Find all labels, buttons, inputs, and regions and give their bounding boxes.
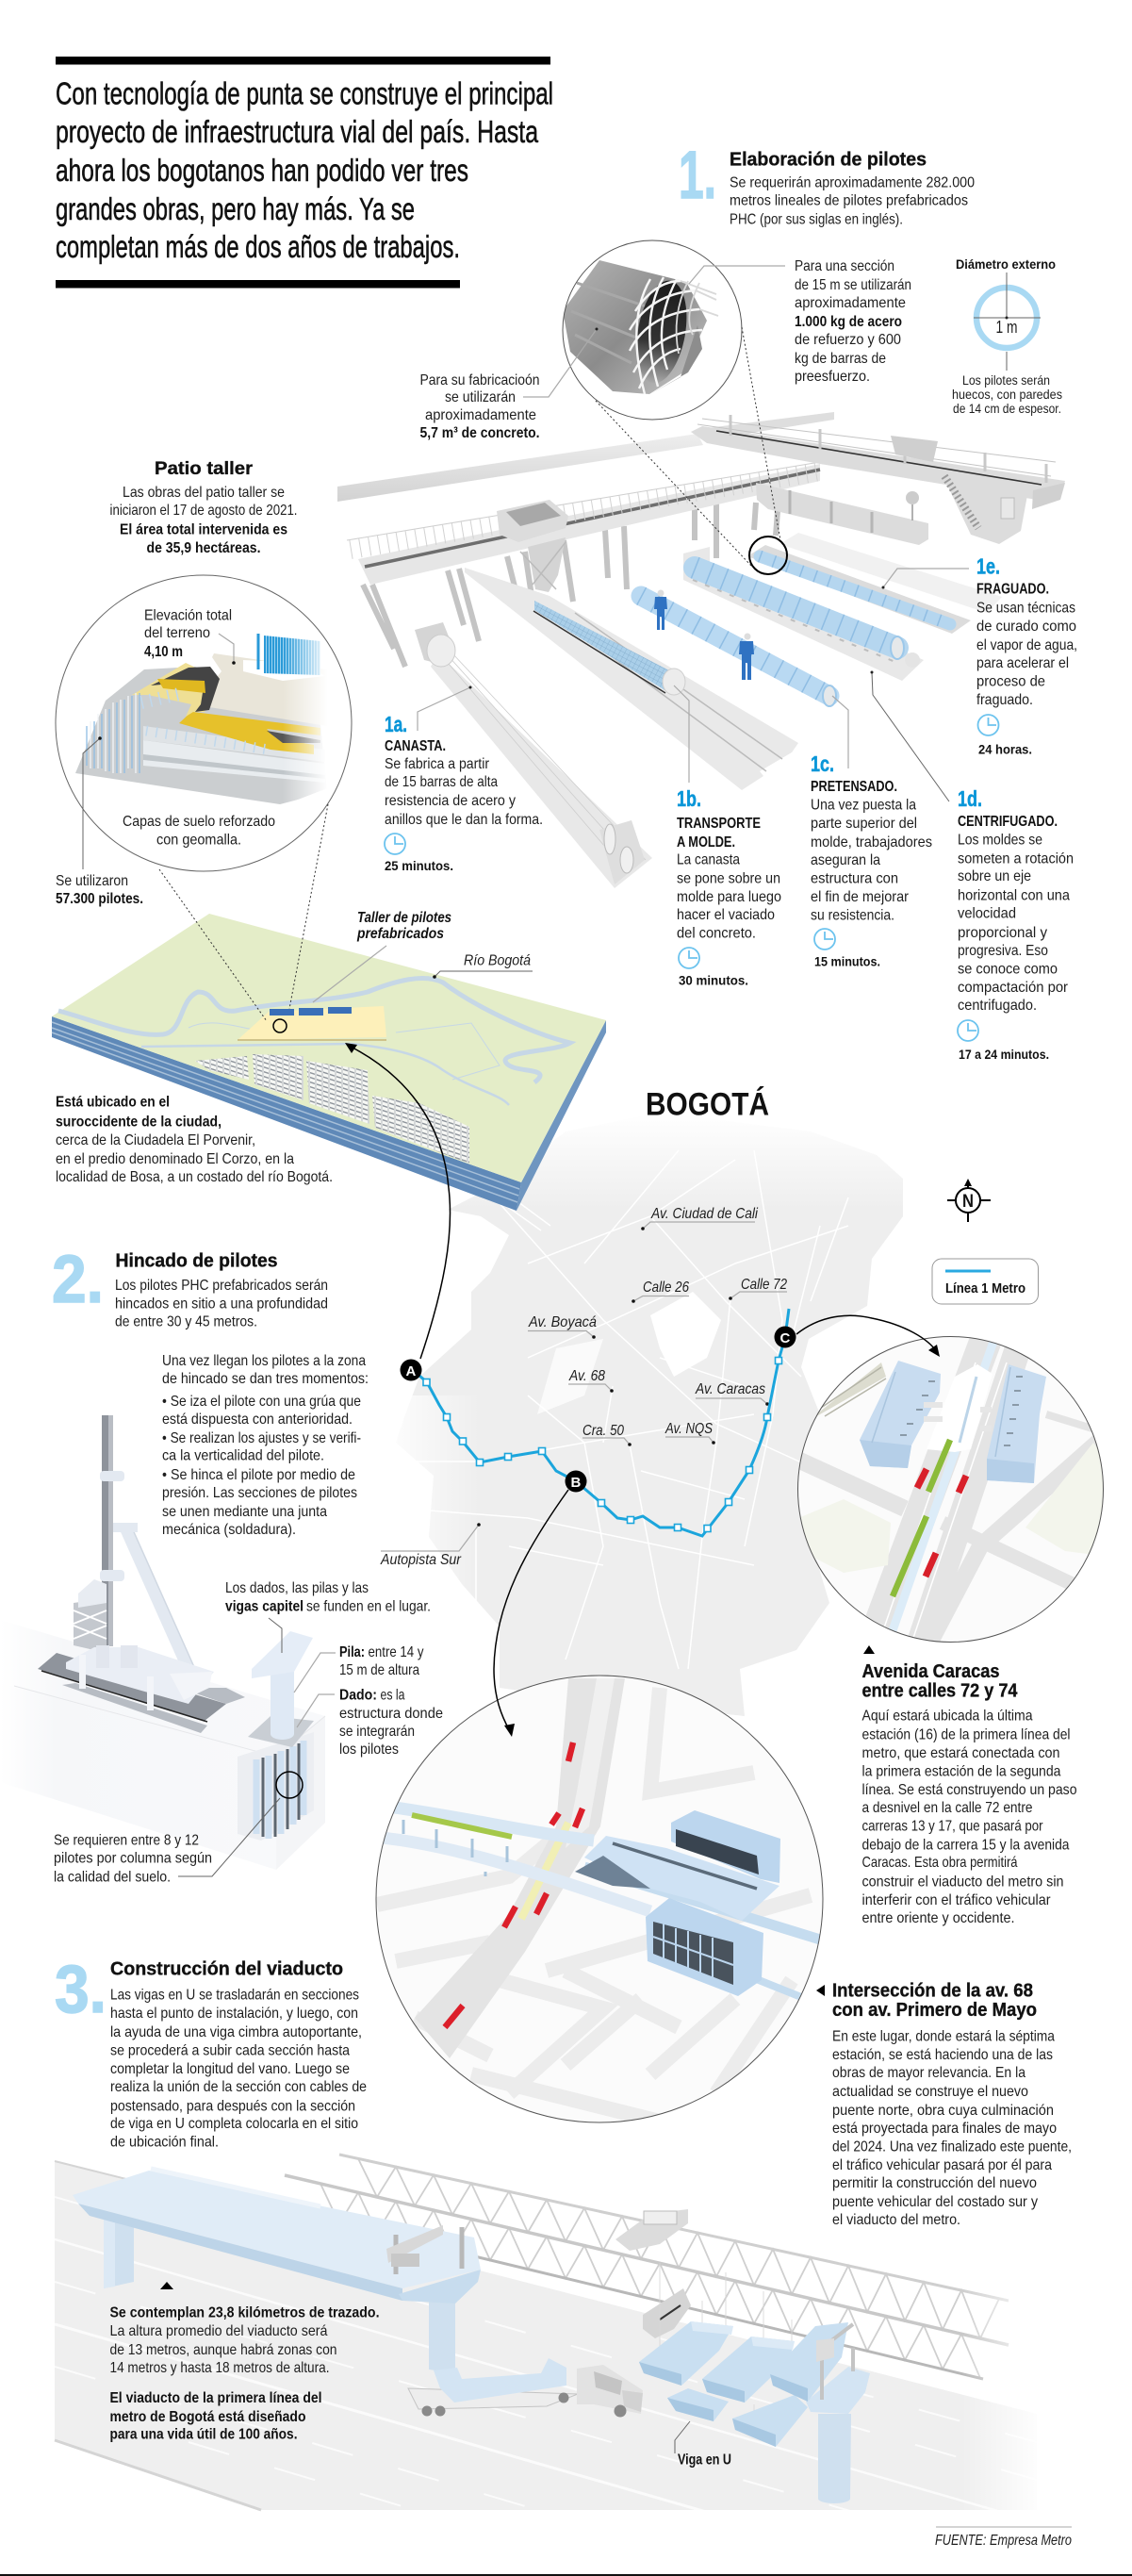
dotted zoom guides to site [159, 804, 328, 1021]
text: Intersección de la av. 68: puente norte, obra cuya culminación [832, 2103, 1054, 2119]
step 1b text: se pone sobre un [677, 871, 780, 886]
step 1c text: 15 minutos. [814, 954, 880, 969]
pier and deck [73, 2169, 481, 2373]
street labels: Cra. 50 [582, 1423, 624, 1439]
text: Intersección de la av. 68: estación, se está haciendo una de las [832, 2047, 1053, 2063]
illustration: viaduct construction scene [55, 2154, 1009, 2512]
driving steps text [162, 1353, 369, 1538]
street labels: Calle 72 [741, 1277, 787, 1293]
title block: grandes obras, pero hay más. Ya se [56, 191, 415, 226]
step 1e text: 24 horas. [978, 741, 1032, 756]
suspended U beams [639, 2263, 808, 2447]
patio magnifier: reinforced soil layers: del terreno [144, 625, 210, 641]
text: Avenida Caracas: a desnivel en la calle 72 entre [861, 1800, 1033, 1816]
text: Intersección de la av. 68: está proyectada para finales de mayo [832, 2121, 1057, 2137]
road surface [55, 2160, 1003, 2512]
section 1 heading: Elaboración de pilotes: metros lineales de pilotes prefabricados [730, 192, 968, 209]
diagram: external diameter ring: Los pilotes serán [962, 372, 1050, 388]
location text: en el predio denominado El Corzo, en la [56, 1151, 294, 1167]
section 3 heading: Construcción del viaducto: Las vigas en U se trasladarán en secciones [110, 1988, 359, 2003]
step 1c text: molde, trabajadores [811, 834, 932, 850]
section 2 heading: Hincado de pilotes: Hincado de pilotes [115, 1250, 277, 1271]
street labels: Autopista Sur [380, 1552, 462, 1568]
callout: steel quantities: de refuerzo y 600 [795, 332, 901, 348]
callout: dados, pilas, vigas capitel [225, 1580, 431, 1653]
callout: dado: los pilotes [339, 1742, 399, 1758]
driving steps text: • Se iza el pilote con una grúa que [162, 1394, 361, 1410]
step 1c text: 1c. [811, 751, 834, 776]
label: Taller de pilotes prefabricados: prefabricados [356, 926, 444, 942]
text: Intersección de la av. 68: actualidad se construye el nuevo [832, 2084, 1028, 2100]
title block: ahora los bogotanos han podido ver tres [56, 153, 468, 188]
title block: proyecto de infraestructura vial del país. Hasta [56, 114, 538, 149]
text: Avenida Caracas: la primera estación de la segunda [861, 1763, 1061, 1780]
callout: pila [294, 1644, 424, 1693]
magnifier B: Av. 68 intersection station [372, 1676, 829, 2140]
step 1d text: Los moldes se [958, 832, 1042, 849]
step 1e curing trench [747, 533, 1002, 634]
callout: steel quantities: Para una sección [795, 258, 894, 274]
marker C [775, 1326, 796, 1348]
callout: dado: Dado: [339, 1688, 377, 1703]
section 2 heading: Hincado de pilotes: hincados en sitio a una profundidad [115, 1296, 328, 1313]
legend [932, 1259, 1039, 1304]
step 1e text: el vapor de agua, [976, 637, 1077, 653]
text: Avenida Caracas: metro, que estará conectada con [861, 1745, 1059, 1761]
step 1d text: centrifugado. [958, 998, 1037, 1014]
section 1 heading: Elaboración de pilotes: 1. [679, 139, 716, 213]
label: Río Bogotá [433, 952, 533, 979]
callout: length and height: 14 metros y hasta 18 metros de altura. [109, 2360, 330, 2376]
gantry crane [691, 412, 1065, 545]
street labels: Av. Boyacá [528, 1314, 597, 1330]
step 1a text: 1a. [385, 712, 407, 736]
street labels: Calle 26 [643, 1280, 689, 1296]
label: Río Bogotá: Río Bogotá [464, 952, 531, 969]
step 1d text: horizontal con una [958, 888, 1070, 903]
callout: 57.300 piles [56, 736, 143, 907]
dotted zoom guides [596, 327, 780, 566]
callout: dado [297, 1688, 443, 1758]
callout: steel quantities: de 15 m se utilizarán [795, 277, 911, 293]
compass [947, 1179, 991, 1222]
section 3 heading: Construcción del viaducto: la ayuda de una viga cimbra autoportante, [110, 2024, 362, 2040]
map base: Bogotá city silhouette [377, 1113, 903, 1716]
step 1e text: de curado como [976, 619, 1076, 635]
callout: pila: Pila: [339, 1644, 365, 1660]
section 3 heading: Construcción del viaducto: postensado, para después con la sección [110, 2099, 355, 2114]
step 1d mold bed [683, 547, 924, 681]
step 1d text: velocidad [958, 905, 1016, 922]
street labels: Av. 68 [568, 1368, 605, 1384]
illustration: pile driving rig and column [0, 1415, 325, 1870]
Patio taller text [109, 459, 298, 556]
detail marker ring [749, 537, 787, 574]
diagram: external diameter ring: 1 m [995, 318, 1018, 337]
callout: pila: 15 m de altura [339, 1662, 419, 1678]
diagram: external diameter ring: Diámetro externo [956, 256, 1056, 272]
step 1b platform and mold [465, 568, 798, 790]
step 1b text: hacer el vaciado [677, 907, 775, 923]
text: Intersección de la av. 68: permitir la construcción del nuevo [832, 2175, 1037, 2191]
section 1 heading: Elaboración de pilotes: PHC (por sus siglas en inglés). [730, 211, 903, 228]
arrow: A to workshop [345, 1043, 451, 1359]
step 1a text: de 15 barras de alta [385, 774, 498, 790]
section 2 heading: Hincado de pilotes: 2. [52, 1243, 104, 1317]
callout: concrete quantity: se utilizarán [445, 389, 516, 405]
illustration: precast pile factory [337, 412, 1065, 888]
Patio taller text: iniciaron el 17 de agosto de 2021. [109, 503, 298, 519]
text: Intersección de la av. 68 [816, 1980, 1072, 2228]
label: Taller de pilotes prefabricados: Taller de pilotes [357, 910, 451, 926]
diagram: external diameter ring: de 14 cm de espesor. [953, 401, 1061, 416]
driving steps text: • Se realizan los ajustes y se verifi- [162, 1430, 361, 1446]
callout: steel quantities [689, 258, 911, 385]
text: Intersección de la av. 68: En este lugar, donde estará la séptima [832, 2029, 1055, 2044]
callout: concrete quantity [420, 328, 598, 441]
section 2 heading: Hincado de pilotes: Los pilotes PHC prefabricados serán [115, 1278, 328, 1294]
arrow: C to station [796, 1315, 940, 1357]
icon: prefabricated pile section magnifier [563, 240, 742, 420]
step 1a text: CANASTA. [385, 738, 446, 754]
step 1c text [811, 696, 932, 969]
heading: Bogotá: BOGOTÁ [646, 1086, 769, 1122]
step 1b text: A MOLDE. [677, 834, 735, 850]
text: Avenida Caracas [861, 1645, 1077, 1926]
street labels [380, 1206, 787, 1568]
patio magnifier: reinforced soil layers: Elevación total [144, 607, 232, 624]
text: Intersección de la av. 68: el tráfico vehicular pasará por él para [832, 2157, 1052, 2173]
step 1d text: CENTRIFUGADO. [958, 814, 1058, 830]
step 1a text: 25 minutos. [385, 858, 453, 873]
driving steps text: está dispuesta con anterioridad. [162, 1412, 353, 1428]
columns [363, 502, 778, 667]
step 1d text: 17 a 24 minutos. [959, 1047, 1049, 1062]
callout: concrete quantity: aproximadamente [425, 407, 536, 423]
driving steps text: Una vez llegan los pilotes a la zona [162, 1353, 366, 1369]
step 1e text: 1e. [976, 554, 1000, 579]
driving steps text: ca la verticalidad del pilote. [162, 1448, 324, 1463]
callout: piles per column: la calidad del suelo. [54, 1869, 171, 1886]
section 2 heading: Hincado de pilotes [52, 1243, 328, 1329]
step 1e text: fraguado. [976, 692, 1033, 708]
driving steps text: mecánica (soldadura). [162, 1522, 296, 1538]
step 1b text: TRANSPORTE [677, 816, 761, 832]
legend: Línea 1 Metro [945, 1280, 1025, 1296]
diagram: external diameter ring: huecos, con paredes [952, 387, 1062, 402]
location text: localidad de Bosa, a un costado del río Bogotá. [56, 1169, 333, 1185]
callout: 57.300 piles: 57.300 pilotes. [56, 891, 143, 907]
street labels: Av. Caracas [695, 1381, 765, 1397]
callout: length and height: Se contemplan 23,8 kilómetros de trazado. [109, 2304, 379, 2321]
step 1c text: PRETENSADO. [811, 779, 897, 795]
truss [285, 2155, 1009, 2379]
driving steps text: • Se hinca el pilote por medio de [162, 1467, 355, 1483]
callout: dados, pilas, vigas capitel: vigas capitel [225, 1599, 304, 1614]
text: Avenida Caracas: carreras 13 y 17, que pasará por [861, 1818, 1043, 1835]
text: Avenida Caracas: Caracas. Esta obra permitirá [861, 1855, 1018, 1871]
section 3 heading: Construcción del viaducto [55, 1953, 367, 2150]
callout: steel quantities: aproximadamente [795, 295, 906, 311]
section 3 heading: Construcción del viaducto: completar la longitud del vano. Luego se [110, 2061, 350, 2077]
step 1b text: La canasta [677, 852, 740, 867]
step 1d text: proporcional y [958, 925, 1047, 941]
callout: length and height: La altura promedio del viaducto será [109, 2323, 328, 2339]
location text [56, 1094, 333, 1185]
patio magnifier: reinforced soil layers: 4,10 m [144, 644, 183, 660]
patio magnifier: reinforced soil layers: con geomalla. [156, 832, 241, 849]
arrow: B to intersection [494, 1490, 568, 1737]
step 1c text: su resistencia. [811, 907, 894, 924]
step 1a text [385, 686, 543, 873]
text: Avenida Caracas: línea. Se está construyendo un paso [861, 1782, 1077, 1798]
text: Avenida Caracas: estación (16) de la primera línea del [861, 1727, 1071, 1742]
gantries [615, 2209, 691, 2338]
Patio taller text: de 35,9 hectáreas. [147, 540, 260, 556]
section 3 heading: Construcción del viaducto: de viga en U completa colocarla en el sitio [110, 2116, 358, 2132]
column [248, 1631, 314, 1747]
bottom rule [0, 2574, 1132, 2576]
driving steps text: de hincado se dan tres momentos: [162, 1371, 369, 1387]
urban blocks [195, 1054, 469, 1164]
text: Avenida Caracas: Aquí estará ubicada la última [861, 1709, 1033, 1724]
far pier [770, 2322, 870, 2503]
title block [56, 57, 553, 289]
marker B [566, 1471, 586, 1492]
label: Taller de pilotes prefabricados [313, 910, 451, 1002]
piles under column [238, 1732, 314, 1841]
patio magnifier: reinforced soil layers [56, 575, 356, 871]
step 1c text: el fin de mejorar [811, 889, 910, 905]
workshop yard [238, 1006, 386, 1040]
step 1b text: del concreto. [677, 926, 756, 941]
callout: length and height: de 13 metros, aunque habrá zonas con [109, 2342, 337, 2358]
text: Avenida Caracas: interferir con el tráfico vehicular [861, 1892, 1051, 1908]
street labels: Av. Ciudad de Cali [650, 1206, 758, 1222]
driving steps text: se unen mediante una junta [162, 1504, 327, 1520]
step 1d text: compactación por [958, 980, 1069, 996]
section 3 heading: Construcción del viaducto: se procederá a subir cada sección hasta [110, 2042, 350, 2059]
location text: cerca de la Ciudadela El Porvenir, [56, 1132, 255, 1148]
street labels: Av. NQS [664, 1421, 713, 1437]
walkway [347, 462, 820, 585]
driving steps text: presión. Las secciones de pilotes [162, 1485, 357, 1501]
callout: length and height: El viaducto de la primera línea del [109, 2390, 322, 2406]
step 1c text: estructura con [811, 871, 898, 886]
title block: completan más de dos años de trabajos. [56, 229, 460, 264]
compass: N [962, 1192, 974, 1212]
marker A [400, 1360, 422, 1380]
marker A: A [405, 1363, 417, 1379]
callout: length and height: metro de Bogotá está diseñado [109, 2409, 306, 2425]
step 1a text: resistencia de acero y [385, 793, 516, 809]
section 2 heading: Hincado de pilotes: de entre 30 y 45 metros. [115, 1314, 257, 1329]
step 1c text: parte superior del [811, 816, 917, 832]
step 1d text: 1d. [958, 786, 982, 811]
callout: dado: estructura donde [339, 1706, 443, 1722]
text: Avenida Caracas: Avenida Caracas [861, 1661, 999, 1682]
text: Intersección de la av. 68: puente vehicular del costado sur y [832, 2194, 1038, 2210]
callout: dado: es la [381, 1688, 405, 1703]
callout: concrete quantity: 5,7 m³ de concreto. [420, 425, 539, 441]
step 1c text: aseguran la [811, 852, 880, 868]
title block: Con tecnología de punta se construye el principal [56, 75, 553, 111]
callout: dado: se integrarán [339, 1724, 415, 1740]
diagram: external diameter ring [952, 256, 1062, 416]
callout: steel quantities: 1.000 kg de acero [795, 314, 902, 330]
callout: steel quantities: kg de barras de [795, 351, 886, 367]
Patio taller text: Las obras del patio taller se [123, 485, 285, 501]
marker B: B [571, 1475, 581, 1491]
step 1c blue mold [641, 596, 836, 706]
section 1 heading: Elaboración de pilotes: Elaboración de pilotes [730, 149, 927, 170]
hopper [497, 500, 568, 592]
marker C: C [780, 1330, 790, 1346]
text: Intersección de la av. 68: Intersección de la av. 68 [832, 1980, 1033, 2001]
callout: concrete quantity: Para su fabricacioón [420, 372, 539, 388]
text: Avenida Caracas: entre calles 72 y 74 [861, 1680, 1018, 1701]
section 1 heading: Elaboración de pilotes: Se requerirán aproximadamente 282.000 [730, 175, 975, 190]
callout: piles per column: pilotes por columna según [54, 1850, 212, 1867]
callout: 57.300 piles: Se utilizaron [56, 873, 128, 889]
location text: Está ubicado en el [56, 1094, 170, 1111]
Patio taller text: Patio taller [155, 459, 254, 479]
text: Intersección de la av. 68: el viaducto del metro. [832, 2212, 960, 2228]
Patio taller text: El área total intervenida es [120, 522, 287, 537]
source: FUENTE: Empresa Metro [935, 2533, 1072, 2549]
step 1c text: Una vez puesta la [811, 798, 916, 813]
text: Intersección de la av. 68: del 2024. Una vez finalizado este puente, [832, 2138, 1072, 2155]
step 1a cage [415, 622, 652, 888]
label: Viga en U: Viga en U [678, 2452, 731, 2469]
callout: pila: entre 14 y [368, 1644, 424, 1660]
step 1b text: 30 minutos. [679, 973, 748, 988]
label: Viga en U [675, 2421, 731, 2469]
workers [654, 590, 754, 680]
callout: piles per column [54, 1798, 280, 1886]
callout: length and height: para una vida útil de 100 años. [109, 2427, 298, 2442]
step 1d text: sobre un eje [958, 868, 1031, 884]
text: Avenida Caracas: construir el viaducto del metro sin [861, 1874, 1063, 1890]
step 1e text [882, 554, 1077, 756]
slab [0, 1620, 325, 1870]
patio magnifier: reinforced soil layers: Capas de suelo reforzado [123, 814, 275, 830]
step 1a text: Se fabrica a partir [385, 756, 490, 772]
step 1e text: proceso de [976, 673, 1045, 690]
callout: piles per column: Se requieren entre 8 y 12 [54, 1833, 199, 1848]
callout: steel quantities: preesfuerzo. [795, 369, 870, 385]
step 1b text: 1b. [677, 786, 701, 811]
step 1b text [674, 685, 781, 988]
section 3 heading: Construcción del viaducto: hasta el punto de instalación, y luego, con [110, 2006, 358, 2022]
magnifier C: Avenida Caracas station [792, 1329, 1112, 1645]
terrain block: workshop site [52, 914, 606, 1211]
step 1e text: FRAGUADO. [976, 581, 1049, 598]
callout: dados, pilas, vigas capitel: se funden en el lugar. [306, 1599, 431, 1614]
step 1e text: Se usan técnicas [976, 600, 1075, 617]
section 3 heading: Construcción del viaducto: Construcción del viaducto [110, 1959, 343, 1980]
text: Avenida Caracas: debajo de la carrera 15 y la avenida [861, 1837, 1070, 1854]
step 1e text: para acelerar el [976, 655, 1069, 671]
step 1b text: molde para luego [677, 889, 781, 905]
step 1a text: anillos que le dan la forma. [385, 812, 543, 828]
truck [408, 2358, 643, 2418]
overhead beam [337, 434, 703, 502]
text: Intersección de la av. 68: obras de mayor relevancia. En la [832, 2065, 1025, 2081]
callout: dados, pilas, vigas capitel: Los dados, las pilas y las [225, 1580, 369, 1596]
step 1d text: se conoce como [958, 962, 1058, 977]
step 1d text: progresiva. Eso [958, 943, 1048, 959]
metro line route [419, 1309, 789, 1536]
text: Avenida Caracas: entre oriente y occidente. [861, 1910, 1014, 1926]
text: Intersección de la av. 68: con av. Primero de Mayo [832, 2000, 1037, 2021]
section 3 heading: Construcción del viaducto: 3. [55, 1953, 107, 2027]
callout: length and height [109, 2282, 379, 2442]
section 3 heading: Construcción del viaducto: de ubicación final. [110, 2135, 219, 2150]
section 1 heading: Elaboración de pilotes [679, 139, 975, 228]
section 3 heading: Construcción del viaducto: realiza la unión de la sección con cables de [110, 2079, 367, 2095]
rig [38, 1415, 245, 1733]
step 1d text [871, 671, 1074, 1062]
step 1d text: someten a rotación [958, 850, 1074, 867]
location text: suroccidente de la ciudad, [56, 1115, 221, 1130]
